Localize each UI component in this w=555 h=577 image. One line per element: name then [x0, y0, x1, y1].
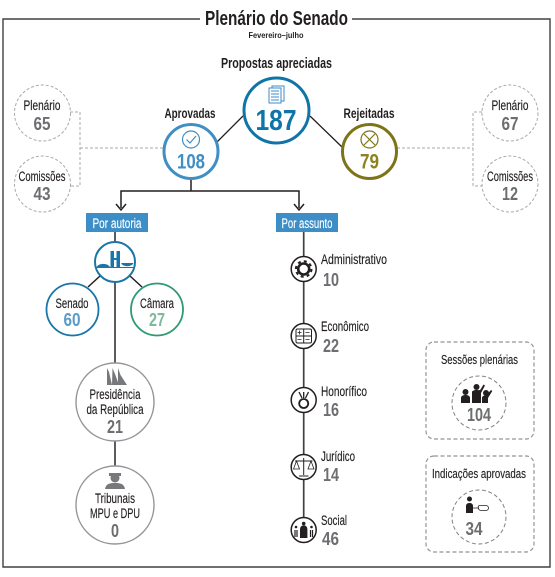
tag: por assunto: Por assunto [282, 216, 332, 231]
icon: gear [291, 256, 316, 282]
circle: senado [46, 284, 98, 336]
panel: sessões plenárias: Sessões plenárias [441, 352, 518, 367]
circle: tribunais: Tribunais [95, 491, 135, 506]
panel: indicações aprovadas: Indicações aprovadas [432, 466, 526, 481]
panel: indicações aprovadas: 34 [466, 518, 483, 539]
dashed circle: comissões aprovadas [14, 156, 70, 212]
tag: por autoria [86, 213, 148, 232]
icon: scales [291, 454, 316, 480]
circle: tribunais [76, 466, 154, 544]
dashed circle: plenário aprovadas: 65 [34, 113, 50, 134]
circle: câmara: 27 [149, 309, 165, 330]
topic: social: 46 [322, 528, 339, 549]
topic: econômico [291, 319, 369, 356]
icon: document stack [269, 86, 284, 103]
circle: senado: Senado [56, 296, 88, 311]
icon: cross [361, 131, 378, 148]
dashed circle: comissões aprovadas: 43 [34, 183, 50, 204]
icon: check [182, 131, 200, 148]
circle: aprovadas [164, 124, 218, 178]
number: 187: 187 [256, 105, 296, 137]
arrowheads [116, 204, 304, 210]
icon: crowd [461, 384, 492, 403]
topic: jurídico [291, 449, 355, 485]
topic: social [291, 513, 347, 549]
topic: jurídico: Jurídico [321, 449, 355, 464]
icon: medal [291, 388, 316, 412]
connectors: top tree [88, 116, 342, 525]
circle: presidência da república [76, 363, 154, 441]
icon: calculator [291, 324, 316, 348]
topic: social: Social [321, 513, 347, 528]
circle: total propostas [244, 78, 309, 143]
topic: econômico: Econômico [321, 319, 369, 334]
dashed circle: comissões rejeitadas: 12 [502, 183, 518, 204]
circle: câmara [131, 284, 183, 336]
dashed circle: comissões aprovadas: Comissões [18, 169, 66, 184]
dashed circle: plenário rejeitadas: Plenário [492, 98, 528, 113]
heading: propostas apreciadas: Propostas apreciadas [221, 55, 332, 72]
tag: por assunto [276, 213, 338, 232]
topic: administrativo [291, 252, 387, 290]
panel: sessões plenárias [426, 342, 534, 439]
circle: presidência da república: 21 [107, 416, 123, 437]
dashed circle: plenário aprovadas: Plenário [24, 98, 60, 113]
topic: honorífico: 16 [323, 399, 339, 420]
icon: people [291, 518, 316, 542]
dashed circle: plenário rejeitadas [482, 85, 538, 141]
tag: por autoria: Por autoria [92, 216, 142, 231]
number: 108: 108 [177, 150, 205, 174]
icon: palácio do planalto [107, 368, 127, 385]
topic: econômico: 22 [323, 335, 339, 356]
topic: jurídico: 14 [323, 464, 340, 485]
circle: tribunais: MPU e DPU [90, 506, 140, 521]
label: rejeitadas: Rejeitadas [344, 106, 394, 121]
panel: sessões plenárias: 104 [467, 404, 492, 425]
dashed circle: plenário rejeitadas: 67 [502, 113, 518, 134]
dashed circle: plenário aprovadas [14, 85, 70, 141]
subtitle: Fevereiro–julho [248, 30, 304, 40]
topic: honorífico: Honorífico [321, 384, 367, 399]
number: 79: 79 [360, 150, 379, 174]
circle: presidência da república: da República [86, 402, 144, 417]
topic: administrativo: 10 [323, 269, 339, 290]
circle: câmara: Câmara [140, 296, 174, 311]
circle: senado: 60 [64, 309, 80, 330]
title: Plenário do Senado [205, 8, 348, 30]
icon: pointing person [466, 496, 489, 513]
circle: presidência da república: Presidência [90, 387, 141, 402]
dashed circle: comissões rejeitadas: Comissões [487, 169, 533, 184]
icon: judge [105, 473, 125, 489]
circle: tribunais: 0 [111, 520, 119, 541]
label: aprovadas: Aprovadas [164, 106, 216, 121]
circle: rejeitadas [342, 124, 396, 178]
panel: indicações aprovadas [426, 456, 534, 552]
topic: honorífico [291, 384, 367, 420]
dashed connectors [70, 112, 482, 186]
icon: congresso nacional [95, 242, 135, 282]
topic: administrativo: Administrativo [321, 252, 387, 267]
dashed circle: comissões rejeitadas [482, 156, 538, 212]
